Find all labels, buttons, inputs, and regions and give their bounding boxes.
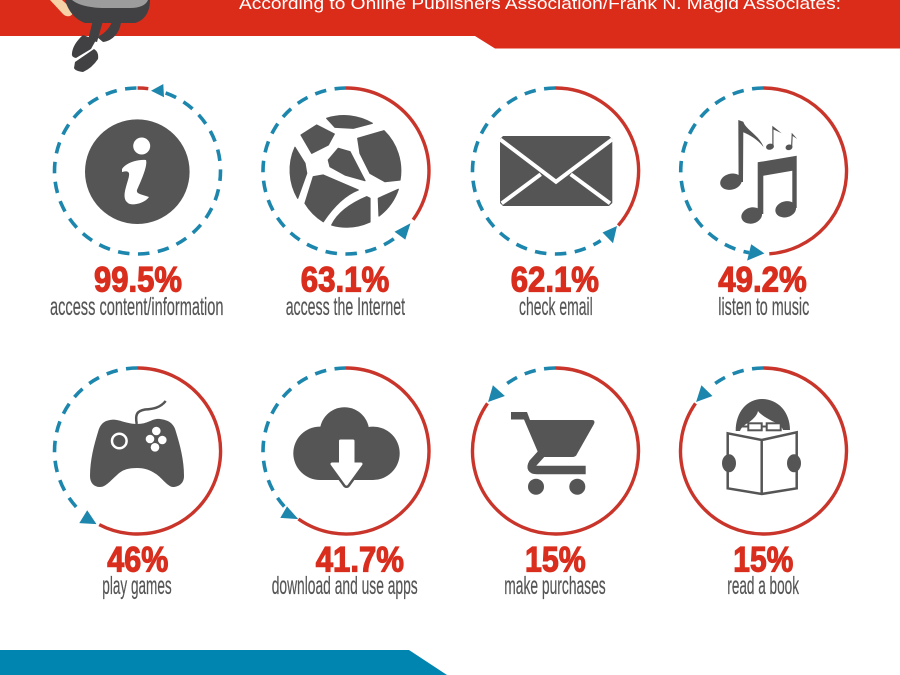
label: check email <box>519 293 593 321</box>
panel: check email <box>472 88 639 321</box>
stat 15%: 15% <box>525 541 586 580</box>
label: listen to music <box>718 293 809 321</box>
header banner <box>0 0 900 48</box>
progress ring 15% <box>472 368 638 534</box>
label: play games <box>102 572 172 600</box>
footer banner <box>0 650 447 675</box>
label: access the Internet <box>286 293 405 321</box>
stat 41.7%: 41.7% <box>316 541 404 580</box>
panel: access content/information <box>50 84 224 321</box>
label: access content/information <box>50 293 224 321</box>
cartoon figure legs <box>50 0 150 72</box>
panel: make purchases <box>472 368 638 600</box>
icon: information <box>85 119 190 224</box>
icon: game controller <box>90 401 184 487</box>
progress ring 99.5% <box>55 84 221 254</box>
stat 63.1%: 63.1% <box>301 261 389 300</box>
progress ring 63.1% <box>263 88 429 254</box>
panel: access the Internet <box>263 88 429 321</box>
panel: download and use apps <box>263 368 429 600</box>
panel: play games <box>55 368 221 600</box>
stat 99.5%: 99.5% <box>94 261 182 300</box>
stat 46%: 46% <box>107 541 168 580</box>
label: make purchases <box>504 572 606 600</box>
icon: cloud download <box>293 407 400 484</box>
icon: music notes <box>718 120 798 226</box>
progress ring 62.1% <box>472 88 639 254</box>
stat 62.1%: 62.1% <box>511 261 599 300</box>
label: read a book <box>727 572 799 600</box>
icon: person reading <box>722 399 801 494</box>
icon: envelope <box>500 136 612 206</box>
progress ring 49.2% <box>681 88 847 261</box>
stat 15%: 15% <box>733 541 793 580</box>
stat 49.2%: 49.2% <box>718 261 807 300</box>
progress ring 15% <box>680 368 846 534</box>
icon: shopping cart <box>511 412 594 495</box>
progress ring 46% <box>55 368 221 534</box>
progress ring 41.7% <box>263 368 429 534</box>
panel: listen to music <box>681 88 847 321</box>
label: download and use apps <box>272 572 418 600</box>
panel: read a book <box>680 368 846 600</box>
icon: globe <box>290 116 401 227</box>
